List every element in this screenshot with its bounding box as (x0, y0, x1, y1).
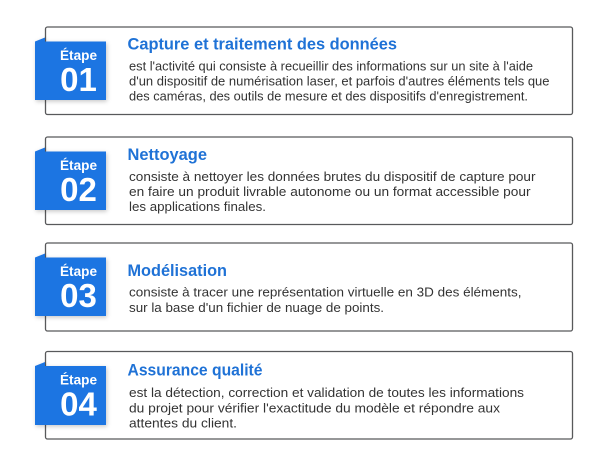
badge: étape 03 (35, 254, 106, 316)
badge: étape 04 (35, 362, 106, 425)
text block 1: des caméras, des outils de mesure et des dispositifs d'enregistrement. (129, 88, 528, 104)
text block 1: d'un dispositif de numérisation laser, et parfois d'autres éléments tels que (129, 74, 550, 88)
badge: étape 01: Étape (60, 47, 97, 63)
text block 2 (129, 169, 536, 214)
panel: étape 2 (35, 137, 572, 224)
text block 3: sur la base d'un fichier de nuage de points. (129, 300, 384, 315)
text block 4: du projet pour vérifier l'exactitude du modèle et répondre aux (129, 400, 501, 416)
text block 1 (129, 58, 550, 104)
badge: étape 02: Étape (60, 157, 97, 173)
panel frame 4 (46, 352, 572, 439)
badge: étape 02: 02 (60, 171, 97, 208)
panel frame 1 (46, 27, 572, 114)
text block 4 (129, 385, 525, 430)
badge: étape 01 (35, 38, 106, 100)
text block 2: en faire un produit livrable autonome ou un format accessible pour (129, 184, 531, 199)
badge: étape 03: 03 (60, 277, 97, 314)
text block 3: consiste à tracer une représentation virtuelle en 3D des éléments, (129, 284, 522, 300)
text block 4: attentes du client. (129, 416, 237, 430)
heading 1: Capture et traitement des données (128, 36, 397, 54)
text block 4: est la détection, correction et validation de toutes les informations (129, 385, 525, 400)
badge: étape 02 (35, 148, 106, 210)
text block 3 (129, 284, 522, 315)
panel: étape 4 (35, 352, 572, 439)
text block 2: consiste à nettoyer les données brutes du dispositif de capture pour (129, 169, 536, 184)
badge: étape 01: 01 (60, 61, 97, 98)
panel: étape 1 (35, 27, 572, 114)
badge: étape 04: 04 (60, 386, 97, 422)
panel frame 2 (46, 137, 572, 224)
badge: étape 04: Étape (60, 372, 97, 388)
panel frame 3 (46, 243, 572, 331)
badge: étape 03: Étape (60, 263, 97, 279)
text block 1: est l'activité qui consiste à recueillir des informations sur un site à l'aide (129, 58, 533, 74)
heading 4: Assurance qualité (128, 362, 262, 380)
text block 2: les applications finales. (129, 199, 266, 214)
heading 3: Modélisation (128, 262, 227, 280)
panel: étape 3 (35, 243, 572, 331)
heading 2: Nettoyage (128, 146, 207, 164)
